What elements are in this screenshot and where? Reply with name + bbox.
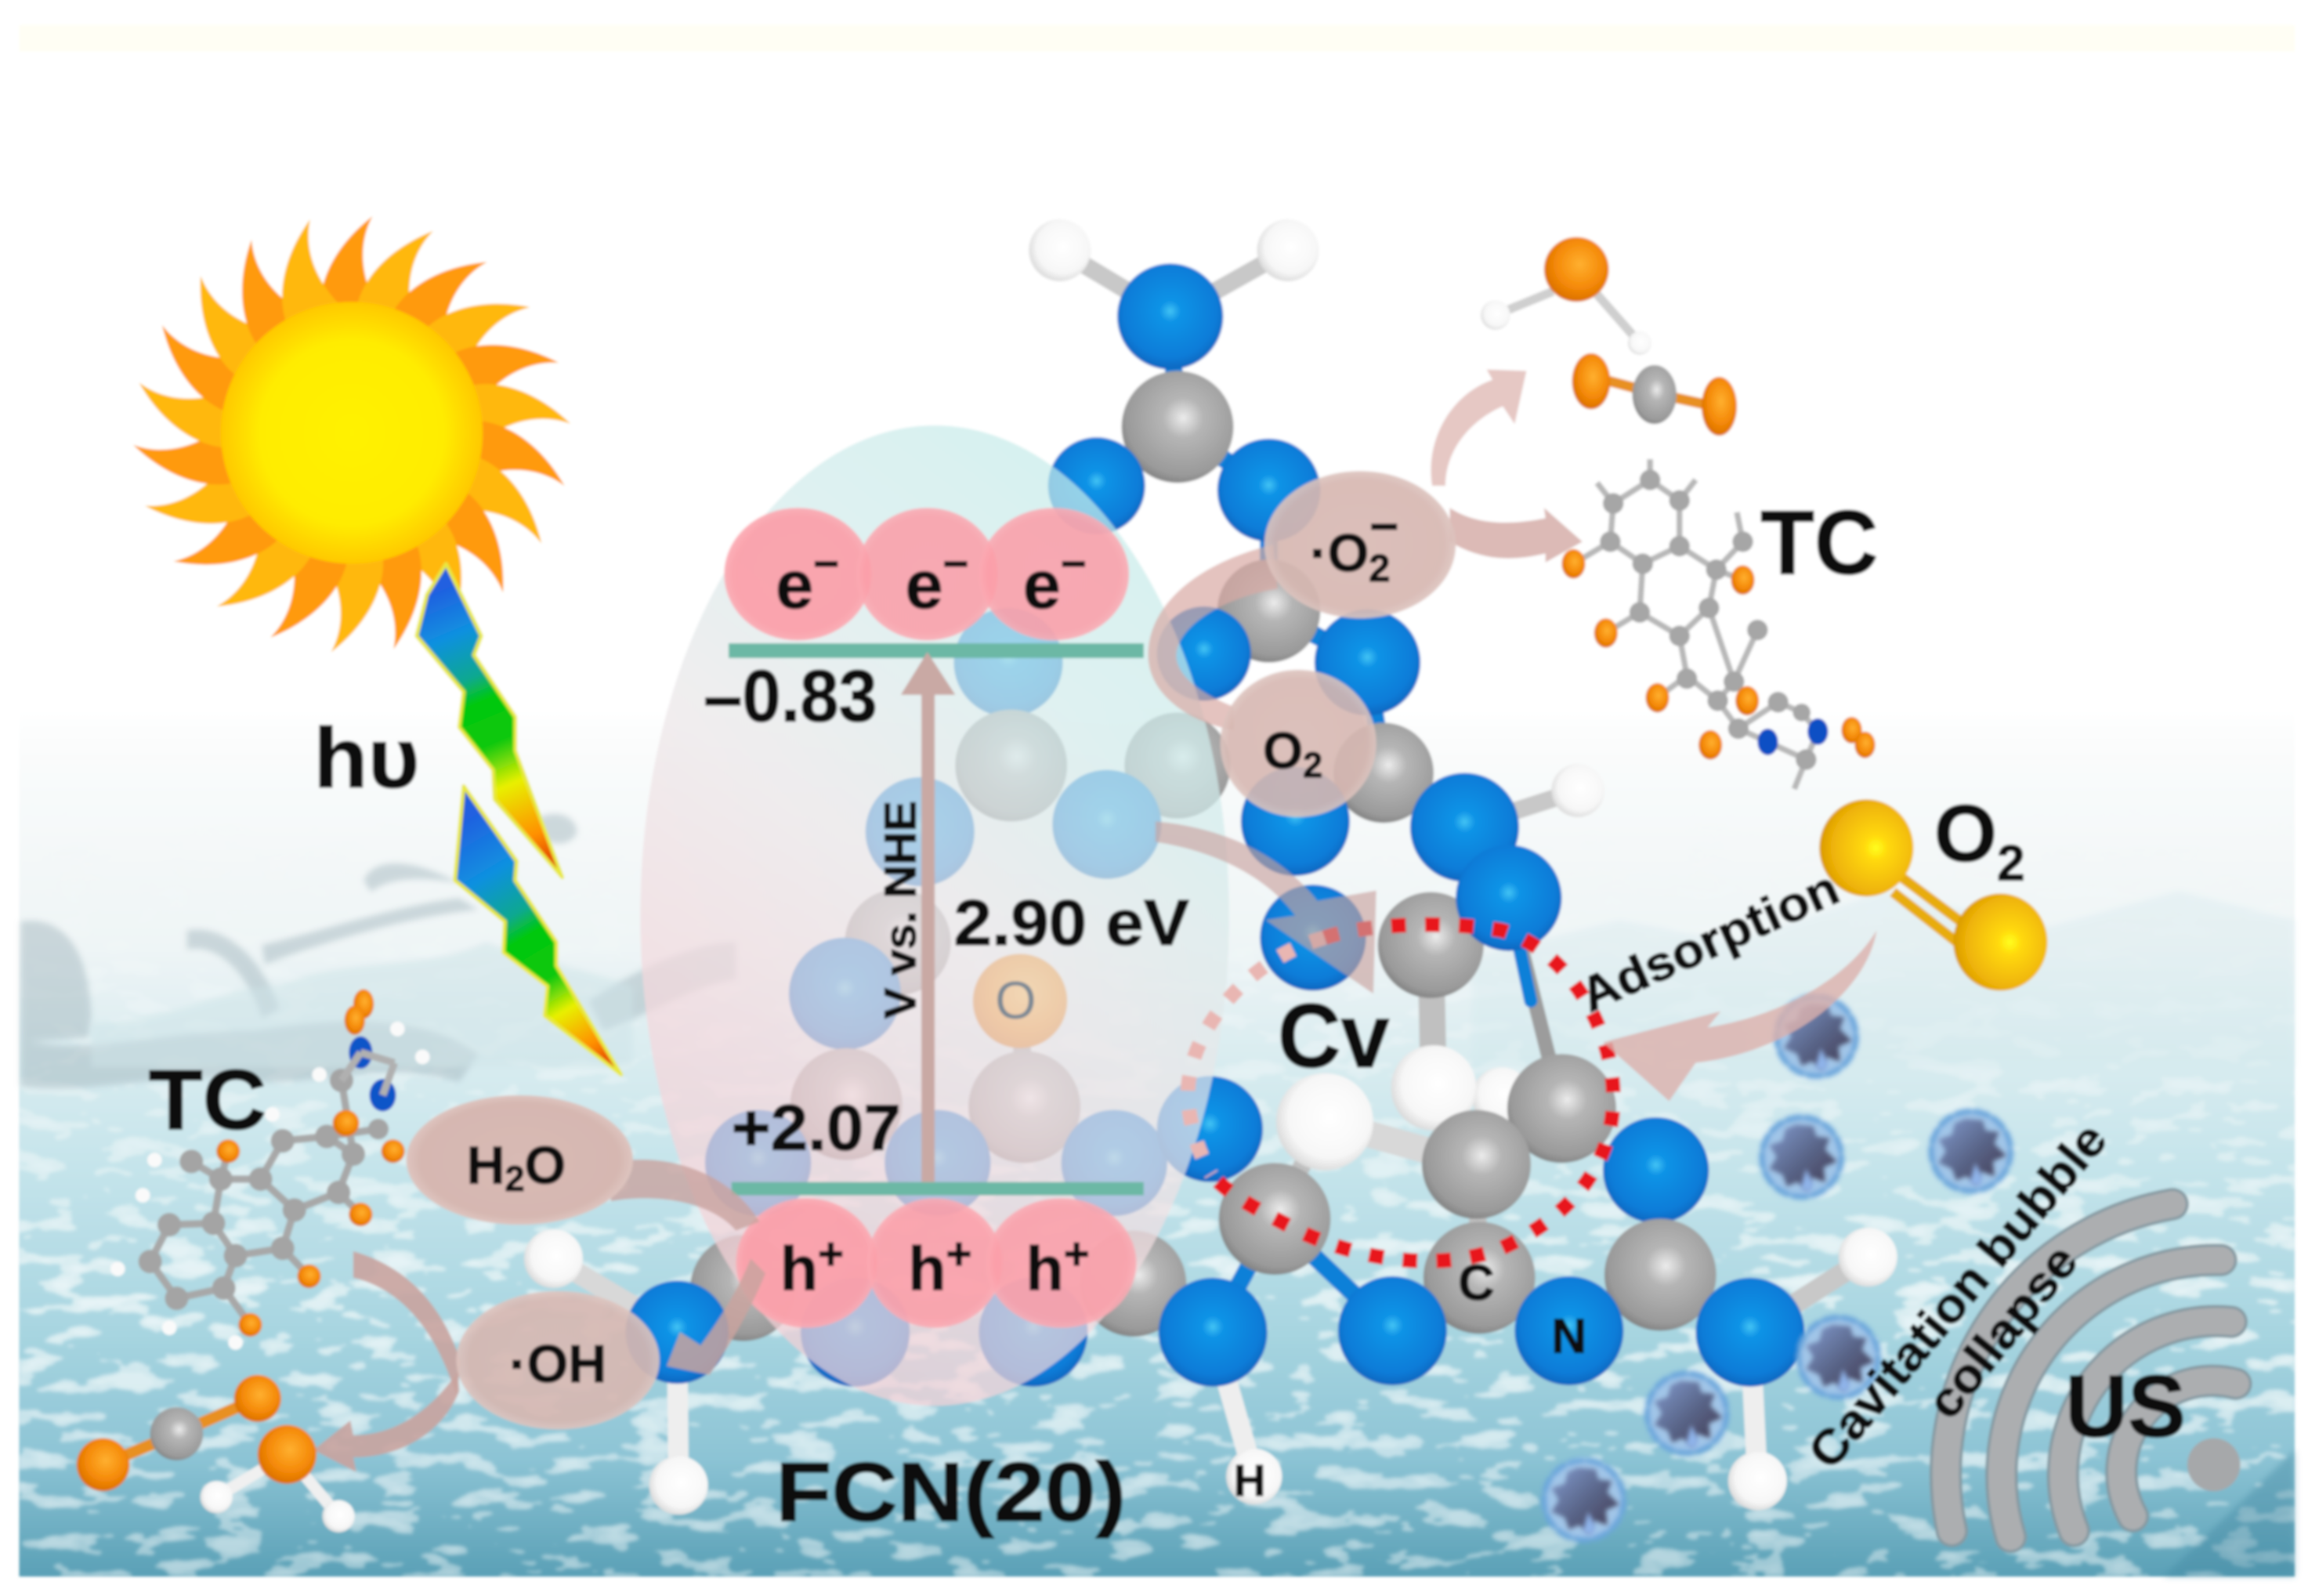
arrow: band gap [901, 652, 955, 1182]
conduction band line [729, 643, 1144, 658]
bubble: superoxide radical: − [1369, 498, 1398, 554]
label: nitrogen atom: N [1551, 1310, 1586, 1364]
molecule: water lower left [201, 1425, 355, 1533]
molecule: CO2 upper right [1572, 353, 1737, 436]
bubble: superoxide radical: 2 [1369, 548, 1390, 590]
panel: FCN(20) band-structure ellipse [640, 425, 1229, 1406]
holes row: + [1064, 1229, 1090, 1279]
label: collapse: collapse [1917, 1235, 2089, 1429]
label: ultrasound: US [2065, 1357, 2186, 1456]
label: O2 right: O [1934, 787, 1997, 878]
holes row: h [780, 1234, 818, 1303]
arrow: hydroxyl to products [313, 1372, 459, 1472]
text: conduction band potential: –0.83 [704, 655, 877, 737]
arrow: TC to hydroxyl [353, 1251, 461, 1395]
holes row: h [1026, 1234, 1064, 1303]
bubble: hydroxyl radical: ·OH [509, 1335, 606, 1394]
icon: lightning bolt lower [455, 786, 621, 1075]
label: TC right: TC [1760, 492, 1878, 594]
molecule: adsorbing O2 [1819, 799, 2047, 990]
molecule: FCN atoms and bonds [524, 219, 1897, 1515]
bubble: water: H [467, 1137, 505, 1196]
holes row: + [818, 1229, 844, 1279]
arrow: superoxide to TC [1450, 508, 1583, 563]
O atom label: O [995, 972, 1036, 1030]
arrow: O2 adsorption [1603, 930, 1876, 1101]
molecule: TC right [1561, 459, 1876, 789]
arrow: water to holes [611, 1160, 759, 1231]
electrons row: − [813, 538, 839, 588]
electrons row: e [1023, 548, 1061, 623]
molecule: TC left [110, 990, 430, 1350]
bubble: water [407, 1095, 633, 1225]
arrow: holes to hydroxyl [667, 1258, 765, 1375]
bubble: water: 2 [505, 1159, 525, 1199]
label: cavitation bubble: Cavitation bubble [1798, 1113, 2118, 1479]
label: O2 right: 2 [1997, 835, 2025, 892]
icon: ultrasound waves [1946, 1204, 2241, 1536]
bubble: hydroxyl radical [456, 1291, 660, 1429]
red dotted circle: carbon vacancy [1188, 925, 1613, 1261]
label: hydrogen atom: H [1234, 1456, 1265, 1505]
text: band gap: 2.90 eV [953, 886, 1189, 959]
electrons row: − [1061, 538, 1087, 588]
arrow: superoxide to CO2 and water [1431, 370, 1526, 486]
text: valence band potential: +2.07 [732, 1091, 901, 1164]
icon: sun [132, 216, 572, 653]
bubble: water: O [525, 1137, 566, 1196]
electrons row [724, 508, 1129, 640]
molecule: CO2 lower left [77, 1375, 281, 1491]
label: adsorption: Adsorption [1572, 861, 1847, 1022]
electrons row: e [776, 548, 813, 623]
bubble: oxygen: O [1263, 722, 1303, 780]
arrow: vacancy transfer [1156, 821, 1376, 993]
bubble: superoxide radical [1264, 471, 1456, 618]
valence band line [732, 1182, 1144, 1196]
label: carbon vacancy: Cv [1278, 985, 1390, 1087]
cavitation bubbles [1544, 997, 2010, 1540]
icon: lightning bolt upper [417, 564, 563, 878]
holes row: + [946, 1229, 971, 1279]
molecule: water upper right [1481, 237, 1651, 355]
electrons row: − [943, 538, 968, 588]
label: carbon atom: C [1458, 1254, 1495, 1311]
text: vs NHE axis label: V vs. NHE [876, 801, 925, 1019]
arrow: O2 to superoxide [1148, 545, 1278, 730]
label: h-upsilon: hυ [313, 711, 419, 806]
heading: catalyst name: FCN(20) [776, 1445, 1126, 1539]
bubble: superoxide radical: ·O [1310, 524, 1369, 583]
holes row: h [908, 1234, 946, 1303]
label: TC left: TC [149, 1052, 266, 1148]
electrons row: e [905, 548, 943, 623]
bubble: oxygen [1221, 670, 1376, 817]
bubble: oxygen: 2 [1303, 745, 1322, 785]
holes row [736, 1198, 1136, 1328]
